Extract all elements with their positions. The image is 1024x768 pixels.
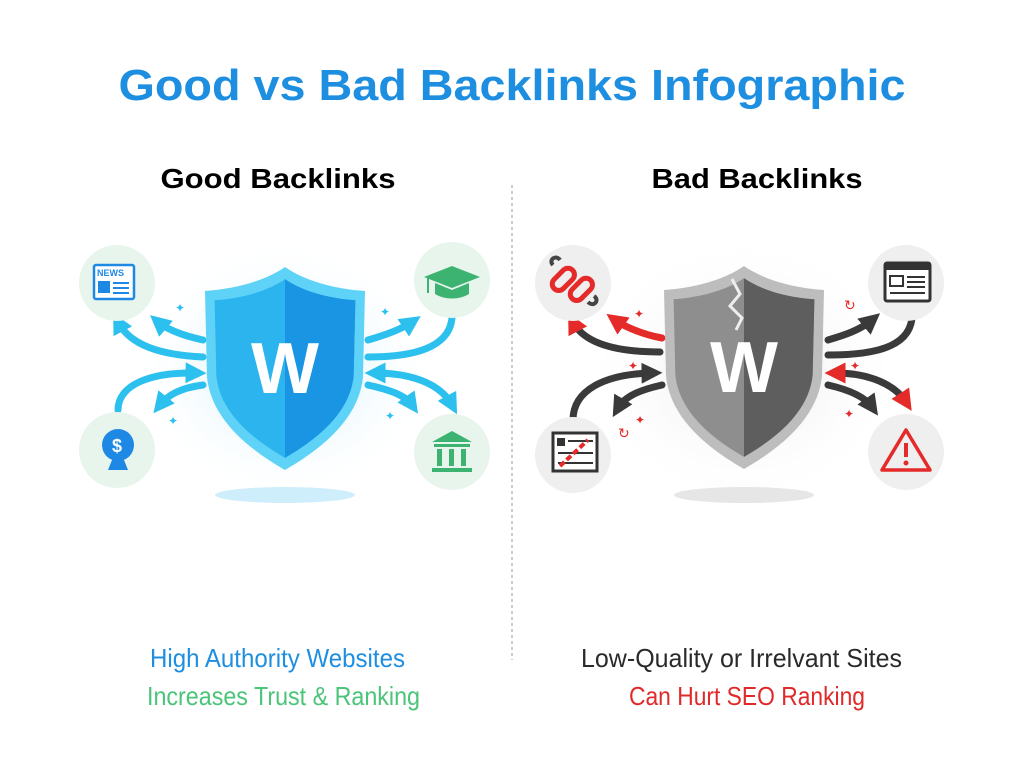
panel: good backlinks illustration: ✦ [380, 305, 390, 319]
icon: broken link [535, 245, 611, 321]
panel: good backlinks illustration [79, 240, 490, 503]
panel: bad backlinks illustration: ✦ [628, 359, 638, 373]
heading: bad: Bad Backlinks [652, 163, 862, 194]
panel: bad backlinks illustration: ✦ [850, 359, 860, 373]
panel: good backlinks illustration: ✦ [168, 414, 178, 428]
icon: graduation cap [414, 242, 490, 318]
text block: good: High Authority Websites [150, 643, 405, 673]
text block: good: Increases Trust & Ranking [147, 681, 420, 711]
panel: bad backlinks illustration: ✦ [635, 413, 645, 427]
panel: bad backlinks illustration: ✦ [634, 307, 644, 321]
panel: good backlinks illustration: ✦ [385, 409, 395, 423]
icon: money: $ [112, 436, 122, 456]
text block: bad: Low-Quality or Irrelvant Sites [581, 643, 902, 673]
icon: money [79, 412, 155, 488]
icon: spam page [535, 417, 611, 493]
text block: bad [581, 643, 902, 711]
text block: bad: Can Hurt SEO Ranking [629, 681, 865, 711]
heading: good: Good Backlinks [160, 163, 396, 194]
panel: bad backlinks illustration: ↻ [844, 299, 856, 314]
arrows: bad [573, 310, 912, 420]
panel: bad backlinks illustration: ✦ [844, 407, 854, 421]
shield: blue: W [251, 329, 319, 409]
icon: news [79, 245, 155, 321]
icon: warning [868, 414, 944, 490]
icon: news: NEWS [97, 268, 124, 278]
panel: bad backlinks illustration: ↻ [618, 427, 630, 442]
icon: browser [868, 245, 944, 321]
shield: grey cracked [664, 266, 824, 469]
panel: good backlinks illustration: ✦ [175, 301, 185, 315]
shield: blue [205, 267, 365, 470]
icon: bank [414, 414, 490, 490]
arrows: good [118, 310, 452, 410]
text block: good [147, 643, 420, 711]
shield: grey cracked: W [710, 328, 778, 408]
panel: bad backlinks illustration [535, 235, 944, 505]
title: Good vs Bad Backlinks Infographic [118, 61, 906, 110]
